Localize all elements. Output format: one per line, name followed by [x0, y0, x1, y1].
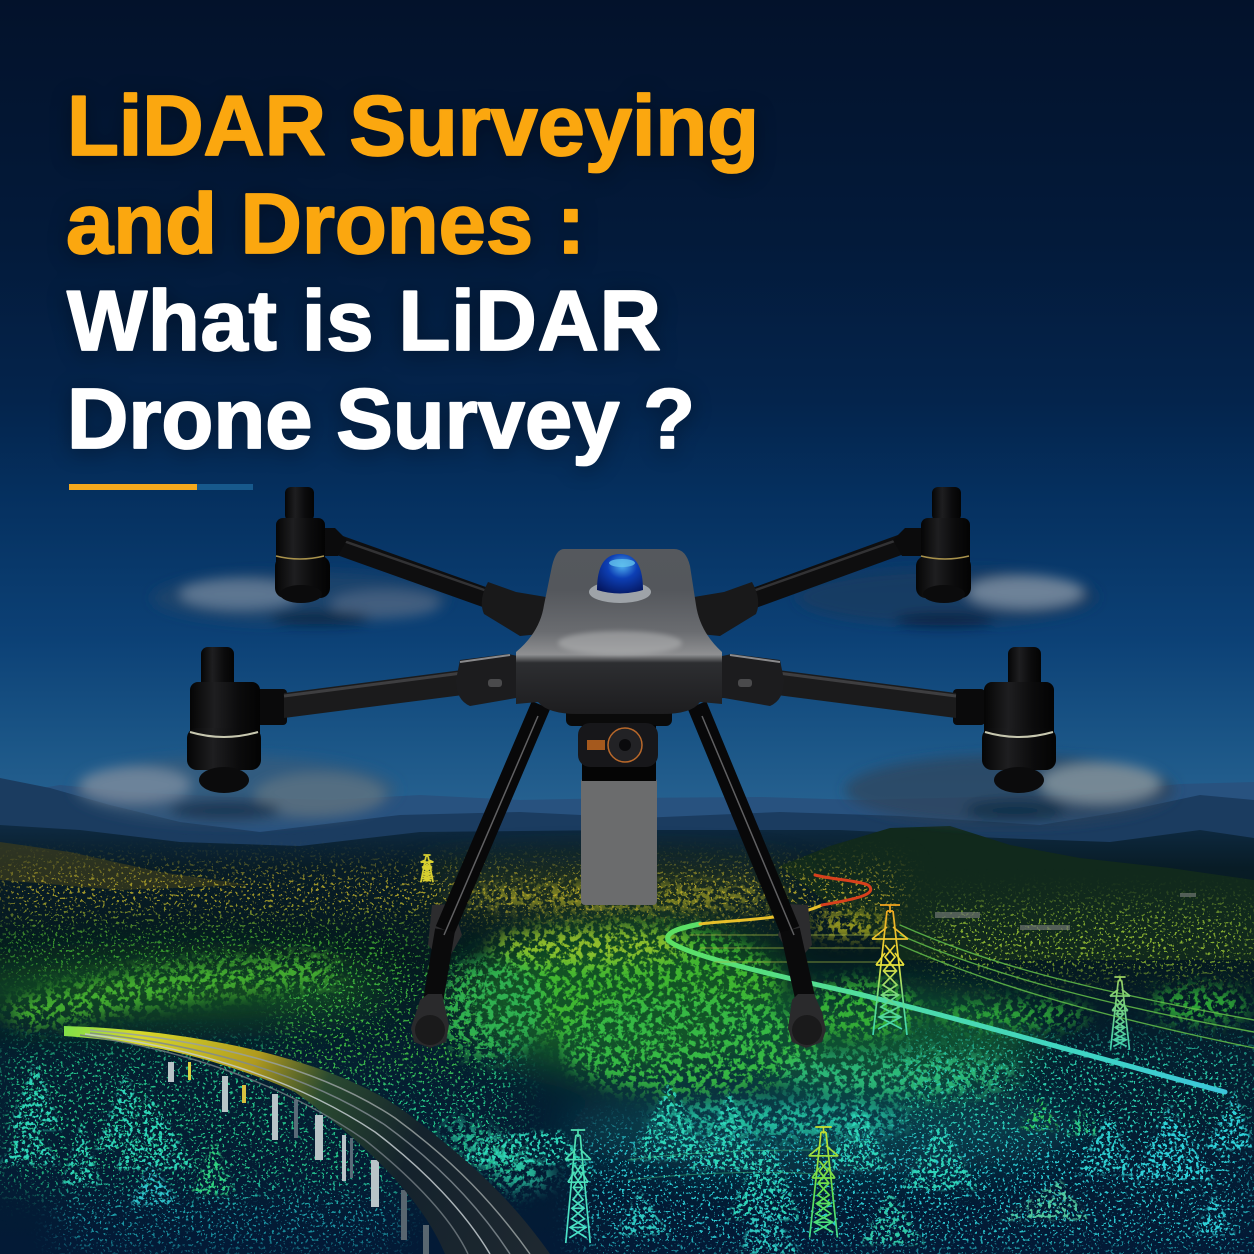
dark green hill on the right — [780, 826, 1254, 960]
sparse point cloud — [0, 870, 1254, 1254]
brown hillside on the left — [0, 842, 250, 890]
teal wireframe trees — [0, 1060, 1254, 1254]
landscape: mountains and LiDAR point cloud terrain — [0, 778, 1254, 1254]
drone main body — [516, 549, 722, 714]
near blue hills — [0, 778, 1254, 880]
ground base — [0, 825, 1254, 1254]
title underline — [69, 484, 253, 490]
drone — [187, 487, 1056, 1048]
averaged colour glow — [0, 869, 1080, 1175]
village buildings on the right — [935, 893, 1196, 930]
body highlight — [558, 631, 682, 655]
arm: top right — [688, 528, 925, 636]
motor: top left — [275, 487, 330, 603]
propeller blur: lower right — [845, 755, 1175, 825]
title line 2: and Drones : — [66, 177, 585, 272]
bridge piers — [168, 1062, 429, 1254]
title line 4: Drone Survey ? — [67, 372, 695, 467]
power tower: orange yellow — [872, 905, 908, 1035]
gimbal camera — [566, 702, 672, 781]
lidar payload box — [581, 778, 657, 905]
propeller blur: top left — [152, 572, 448, 625]
motor: lower right — [982, 647, 1056, 793]
motor: top right — [916, 487, 971, 603]
title — [66, 79, 759, 467]
propeller blur: top right — [797, 569, 1097, 627]
background: night sky — [0, 0, 1254, 800]
arm: top left — [313, 528, 552, 636]
distant mountain ridge — [0, 782, 1254, 860]
title line 3: What is LiDAR — [67, 274, 661, 369]
power tower: teal — [565, 1130, 591, 1243]
arm: lower right — [685, 652, 985, 725]
highway bridge — [64, 1026, 550, 1254]
power tower: distant yellow — [421, 855, 433, 882]
propeller blur: lower left — [73, 756, 397, 824]
power tower: far right — [1110, 977, 1130, 1050]
power line corridor — [628, 875, 1254, 1180]
title line 1: LiDAR Surveying — [67, 79, 759, 174]
leg: left — [411, 705, 541, 1048]
power tower: lime — [809, 1127, 838, 1238]
motor: lower left — [187, 647, 261, 793]
leg: right — [697, 705, 826, 1048]
dense foliage point cloud — [0, 887, 1250, 1190]
lidar dome sensor — [589, 554, 651, 603]
arm: lower left — [255, 652, 555, 725]
